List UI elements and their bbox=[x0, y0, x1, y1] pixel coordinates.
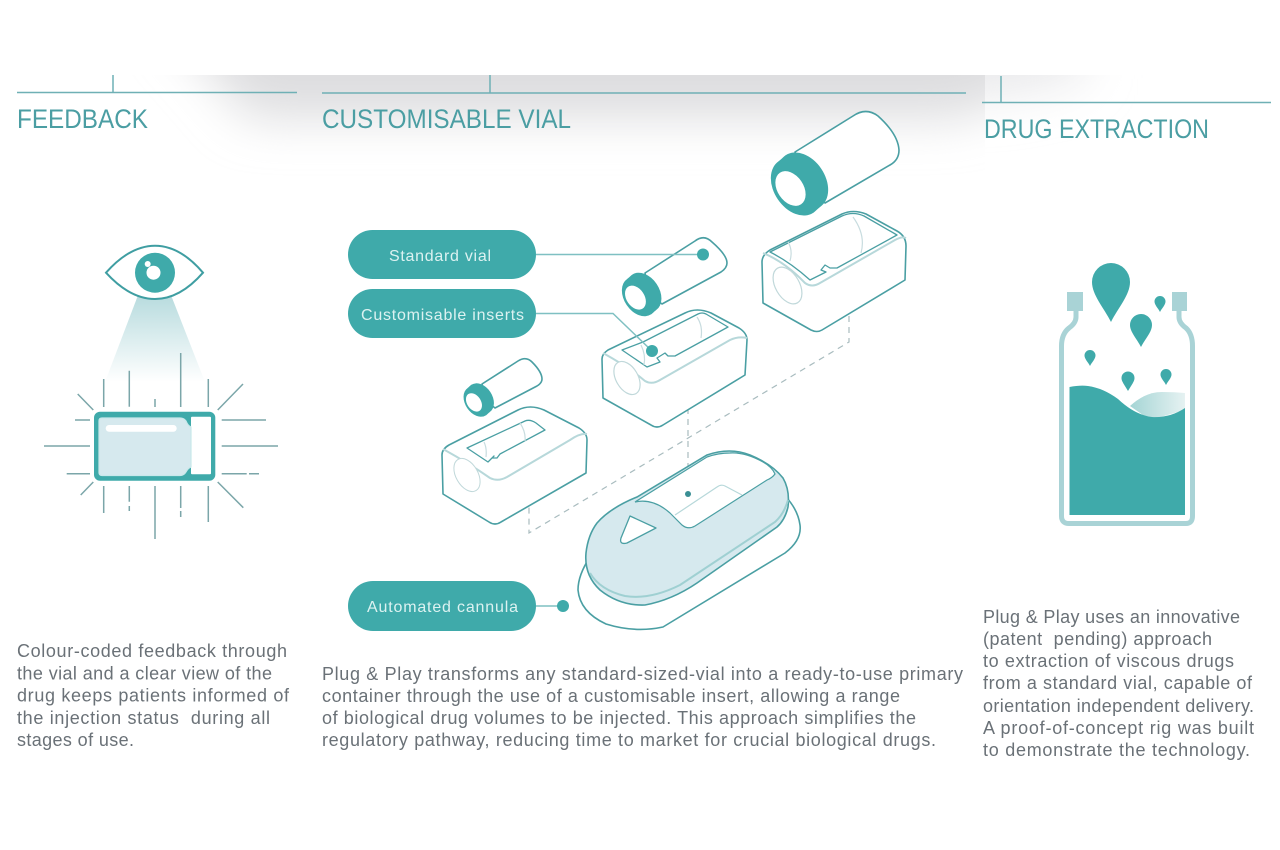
standard vial: large bbox=[760, 112, 899, 225]
insert box: medium bbox=[602, 310, 747, 427]
illustration: eye and glowing vial bbox=[44, 246, 278, 539]
text: customisable vial description bbox=[322, 664, 963, 750]
device triangle button bbox=[621, 516, 656, 543]
dashed assembly lines bbox=[529, 316, 849, 533]
illustration: bottle with drug droplets bbox=[1062, 263, 1192, 524]
icon: vial with colour-coded feedback bbox=[94, 412, 215, 481]
text: drug extraction description: A proof-of-concept rig was built bbox=[983, 718, 1254, 738]
label: standard vial bbox=[348, 230, 709, 279]
text: feedback description: Colour-coded feedback through bbox=[17, 641, 287, 661]
text: feedback description bbox=[17, 641, 290, 750]
label: automated cannula: Automated cannula bbox=[367, 599, 518, 616]
insert box: small bbox=[442, 407, 587, 524]
text: drug extraction description: to extraction of viscous drugs bbox=[983, 651, 1234, 671]
illustration: exploded vial assembly bbox=[348, 112, 906, 631]
text: drug extraction description: (patent pending) approach bbox=[983, 629, 1212, 649]
text: customisable vial description: Plug & Play transforms any standard-sized-vial into a ready-to-use primary bbox=[322, 664, 963, 684]
label: customisable inserts bbox=[348, 289, 658, 357]
text: drug extraction description: orientation independent delivery. bbox=[983, 696, 1254, 716]
text: feedback description: the injection status during all bbox=[17, 708, 270, 728]
text: drug extraction description: from a standard vial, capable of bbox=[983, 673, 1253, 693]
header: feedback bbox=[17, 75, 297, 134]
insert box: large bbox=[762, 212, 906, 332]
dot in device bbox=[685, 491, 691, 497]
header: customisable vial: CUSTOMISABLE VIAL bbox=[322, 104, 571, 134]
text: feedback description: drug keeps patients informed of bbox=[17, 686, 290, 706]
header: drug extraction: DRUG EXTRACTION bbox=[984, 114, 1209, 144]
text: customisable vial description: regulatory pathway, reducing time to market for crucial biological drugs. bbox=[322, 730, 936, 750]
light beam bbox=[105, 290, 205, 382]
text: drug extraction description bbox=[983, 607, 1254, 760]
header: drug extraction bbox=[982, 76, 1271, 144]
standard vial: small bbox=[458, 359, 542, 422]
label: customisable inserts: Customisable inserts bbox=[361, 307, 524, 324]
text: customisable vial description: container through the use of a customisable insert, allowing a range bbox=[322, 686, 900, 706]
text: drug extraction description: Plug & Play uses an innovative bbox=[983, 607, 1240, 627]
device base and body bbox=[578, 451, 800, 629]
header: customisable vial bbox=[322, 75, 966, 134]
feedback rays bbox=[44, 353, 278, 539]
text: drug extraction description: to demonstrate the technology. bbox=[983, 740, 1250, 760]
liquid bbox=[1070, 386, 1185, 515]
grey header shading bbox=[192, 75, 1078, 134]
back liquid wave bbox=[1130, 392, 1185, 420]
bottle outline bbox=[1062, 311, 1192, 524]
label: standard vial: Standard vial bbox=[389, 248, 491, 265]
text: feedback description: stages of use. bbox=[17, 730, 134, 750]
text: customisable vial description: of biological drug volumes to be injected. This approach simplifies the bbox=[322, 708, 916, 728]
standard vial: medium bbox=[615, 238, 727, 323]
icon: eye bbox=[106, 246, 203, 299]
device window bbox=[635, 453, 775, 528]
label: automated cannula bbox=[348, 581, 569, 631]
text: feedback description: the vial and a clear view of the bbox=[17, 664, 272, 684]
bottle caps bbox=[1067, 292, 1187, 311]
droplets bbox=[1084, 263, 1172, 391]
header: feedback: FEEDBACK bbox=[17, 104, 148, 134]
